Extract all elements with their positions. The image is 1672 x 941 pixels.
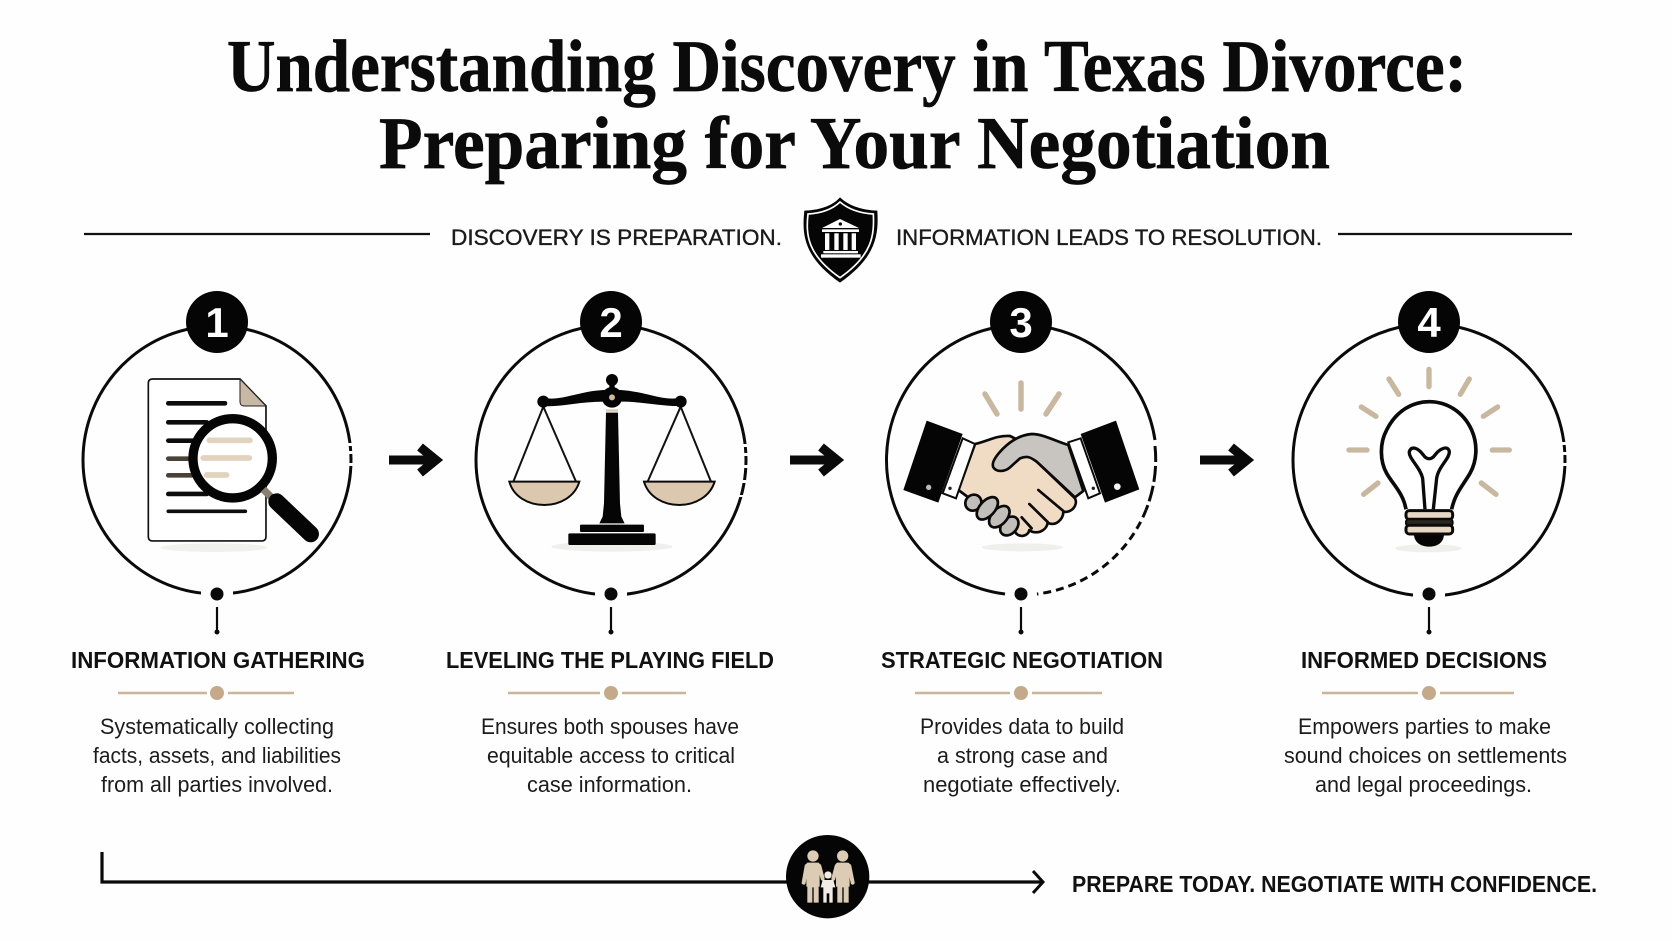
step 4 heading: INFORMED DECISIONS <box>1301 647 1547 673</box>
step 4 ring <box>1293 324 1570 634</box>
arrow 1 <box>389 447 436 473</box>
icon: family in black circle <box>786 835 869 918</box>
step 3 ring <box>886 325 1156 634</box>
icon: light bulb <box>1349 369 1509 552</box>
step 3 description <box>920 714 1124 797</box>
step 1 divider <box>118 686 294 700</box>
icon: handshake <box>903 383 1139 551</box>
icon: scales of justice <box>509 374 715 552</box>
arrow 2 <box>790 447 837 473</box>
step 3 description: negotiate effectively. <box>923 772 1121 797</box>
step 1 heading: INFORMATION GATHERING <box>71 647 365 673</box>
bottom timeline arrow <box>102 852 1043 893</box>
step 1 description: facts, assets, and liabilities <box>93 743 341 768</box>
step 1 ring <box>83 326 356 634</box>
icon: document with magnifying glass <box>148 379 311 552</box>
step 3 heading: STRATEGIC NEGOTIATION <box>881 647 1163 673</box>
step 3: strategic negotiation <box>881 291 1163 797</box>
step 4 description <box>1284 714 1567 797</box>
tagline banner <box>84 197 1572 283</box>
step 2: leveling the playing field <box>446 291 774 797</box>
step 1 description <box>93 714 341 797</box>
step 2 number badge: 2 <box>599 299 623 346</box>
step 2 divider <box>508 686 686 700</box>
step 1 number badge: 1 <box>205 299 229 346</box>
title: Preparing for Your Negotiation <box>379 103 1330 185</box>
step 2 description: Ensures both spouses have <box>481 714 739 739</box>
step 2 description: equitable access to critical <box>487 743 735 768</box>
step 3 number badge <box>990 291 1052 353</box>
step 3 divider <box>915 686 1102 700</box>
step 4 description: sound choices on settlements <box>1284 743 1567 768</box>
step 3 description: Provides data to build <box>920 714 1124 739</box>
step 2 number badge <box>580 291 642 353</box>
step 4 divider <box>1322 686 1514 700</box>
icon: courthouse shield <box>804 197 878 283</box>
step 3 number badge: 3 <box>1009 299 1033 346</box>
step 2 description: case information. <box>527 772 692 797</box>
step 4 number badge <box>1398 291 1460 353</box>
arrow 3 <box>1200 447 1247 473</box>
step 4: informed decisions <box>1284 291 1570 797</box>
title <box>227 26 1467 185</box>
step 4 number badge: 4 <box>1417 299 1441 346</box>
step 2 heading: LEVELING THE PLAYING FIELD <box>446 647 774 673</box>
step 1 description: Systematically collecting <box>100 714 334 739</box>
title: Understanding Discovery in Texas Divorce: <box>227 26 1467 108</box>
closing call to action: PREPARE TODAY. NEGOTIATE WITH CONFIDENCE. <box>1072 871 1597 897</box>
tagline left: DISCOVERY IS PREPARATION. <box>451 225 782 250</box>
step 4 description: Empowers parties to make <box>1298 714 1551 739</box>
step 4 description: and legal proceedings. <box>1315 772 1532 797</box>
step 2 ring <box>476 325 751 634</box>
step 1 description: from all parties involved. <box>101 772 333 797</box>
step 1 number badge <box>186 291 248 353</box>
tagline right: INFORMATION LEADS TO RESOLUTION. <box>896 225 1322 250</box>
step 1: information gathering <box>71 291 365 797</box>
step 2 description <box>481 714 739 797</box>
step 3 description: a strong case and <box>937 743 1108 768</box>
